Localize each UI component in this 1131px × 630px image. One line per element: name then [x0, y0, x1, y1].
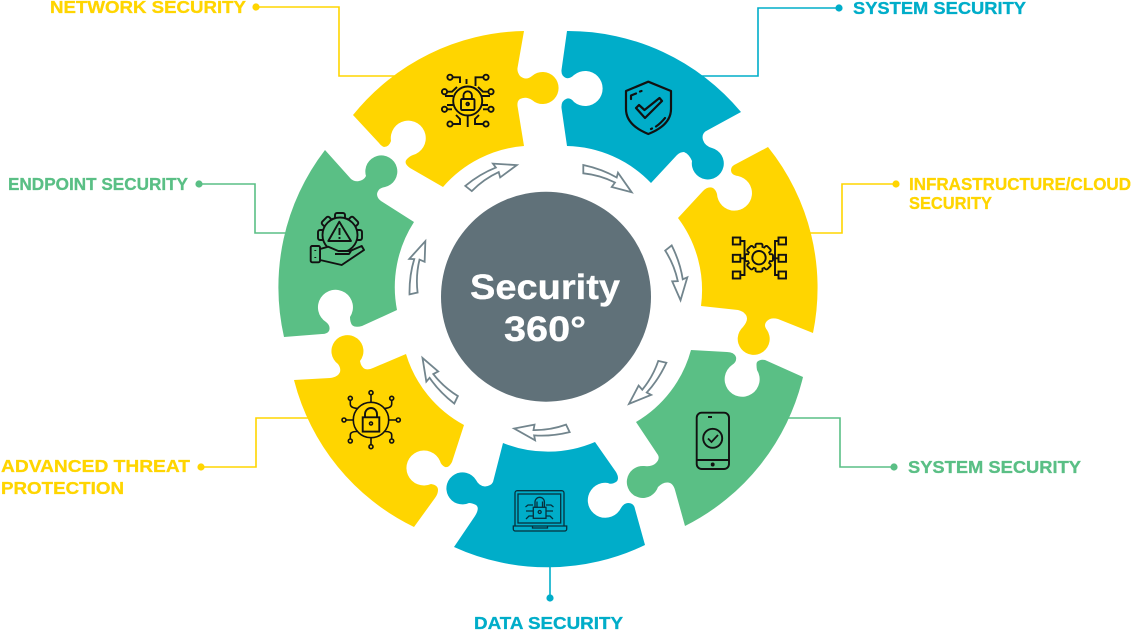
arrow: infrastructure to device [650, 245, 702, 300]
arrow: endpoint to network [399, 241, 436, 294]
puzzle piece: advanced threat protection [294, 335, 464, 527]
puzzle piece: system security [561, 31, 741, 183]
icon: gear with nodes [733, 238, 786, 278]
icon: circuit lock [442, 75, 494, 127]
arrow: network to system [465, 148, 517, 203]
center circle [441, 192, 651, 402]
icon: lock network [342, 391, 400, 449]
callout: network security [50, 0, 395, 76]
callout: system security top [700, 0, 1026, 76]
callout: endpoint security [8, 174, 292, 233]
puzzle piece: network security [353, 31, 559, 187]
puzzle piece: endpoint security [278, 150, 414, 337]
icon: smartphone check [697, 413, 729, 469]
arrow: device to data [629, 357, 666, 410]
callout: system security right: SYSTEM SECURITY [908, 457, 1081, 477]
callout: infrastructure cloud security: SECURITY [909, 193, 992, 213]
title: Security [470, 268, 621, 307]
callout: data security [474, 562, 623, 630]
puzzle piece: system security right [627, 350, 803, 526]
callout: infrastructure cloud security: INFRASTRUCTURE/CLOUD [909, 174, 1131, 194]
arrow: threat to endpoint [411, 358, 466, 404]
callout: advanced threat protection: ADVANCED THREAT [1, 456, 190, 476]
callout: advanced threat protection: PROTECTION [1, 478, 124, 498]
callout: system security right [785, 418, 1081, 477]
icon: laptop lock [513, 491, 567, 531]
callout: endpoint security: ENDPOINT SECURITY [8, 174, 188, 194]
puzzle piece: data security [446, 442, 645, 567]
arrow: data to threat [514, 408, 570, 453]
arrow: system to infrastructure [583, 165, 632, 192]
title [470, 268, 621, 349]
callout: infrastructure cloud security [808, 174, 1131, 233]
icon: hand with warning gear [311, 213, 364, 265]
puzzle piece: infrastructure cloud security [678, 147, 818, 355]
title: 360° [504, 310, 586, 349]
icon: shield check [626, 82, 671, 134]
cycle arrows around center [399, 148, 702, 453]
callout: advanced threat protection [1, 418, 308, 498]
